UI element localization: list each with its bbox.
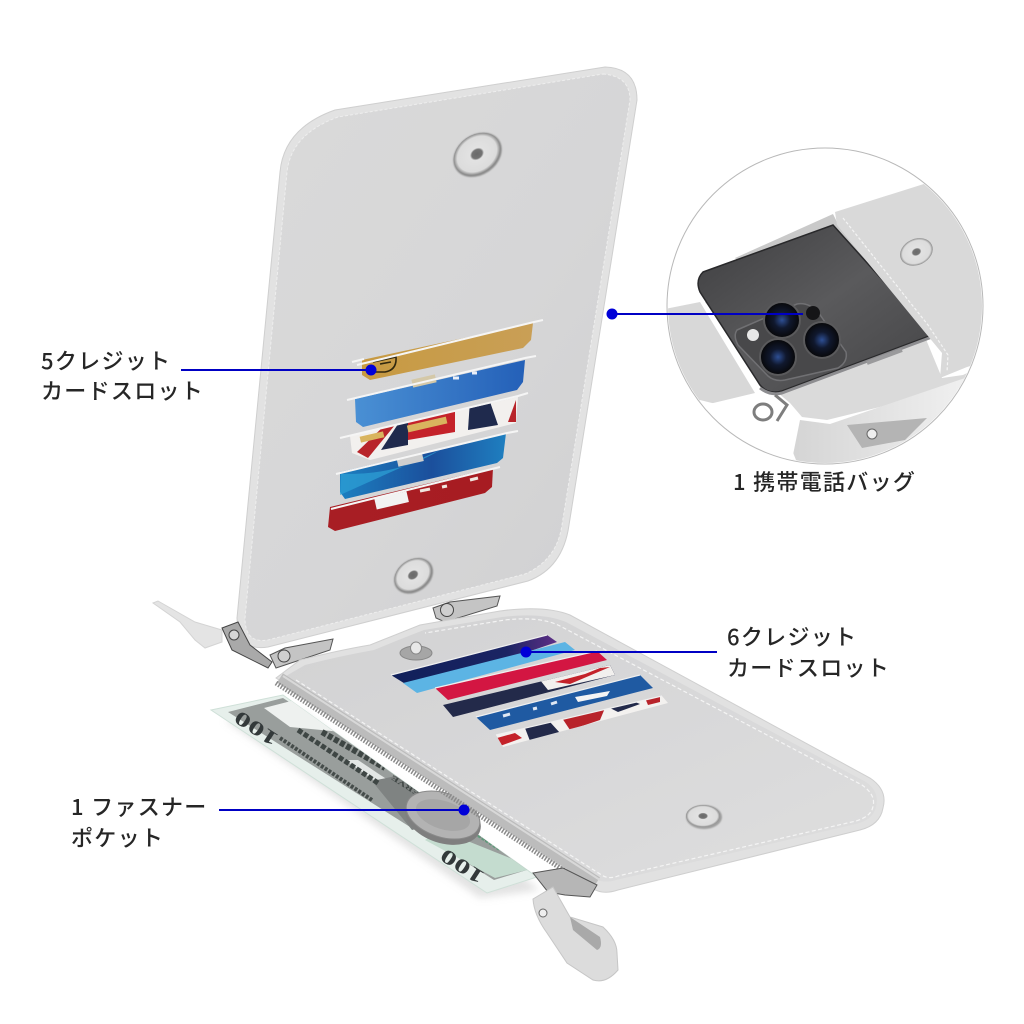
callout: 6 card slots: カードスロット [727, 651, 890, 683]
inset: leather body [668, 214, 967, 463]
strap clasp right [433, 596, 500, 622]
icon: top snap button [445, 124, 510, 186]
lower cards: dark flag card [443, 665, 615, 717]
upper cards: blue card [355, 360, 525, 427]
inset: phone [698, 225, 932, 394]
lower cards: crimson card [435, 651, 607, 700]
zipper pull tab [533, 868, 618, 981]
callout: 5 card slots [41, 344, 376, 406]
panel: upper flap with card slots [237, 67, 637, 648]
strap clasp left [153, 601, 333, 668]
panel: inset phone close-up [660, 148, 990, 470]
callout: phone bag: 1 携帯電話バッグ [733, 465, 916, 497]
bill numeral upper: 100 [230, 706, 282, 751]
inset: camera lenses [747, 302, 840, 375]
lower cards: navy card [391, 635, 557, 690]
inset: ring [754, 395, 787, 421]
zipper [276, 676, 600, 890]
dollar bills [211, 695, 540, 898]
lower cards: flag card [496, 696, 668, 747]
callout: zipper pocket: ポケット [71, 821, 164, 853]
upper cards: red card [328, 468, 493, 531]
lower cards: blue card [476, 675, 653, 730]
upper cards: gold card [362, 323, 533, 380]
upper cards: union flag card [350, 397, 518, 460]
icon: lower snap button [387, 551, 440, 601]
callout: zipper pocket [71, 790, 470, 853]
callout: zipper pocket: 1 ファスナー [71, 790, 208, 822]
slot edges [391, 635, 662, 735]
slot edges [331, 320, 543, 509]
callout: 5 card slots: カードスロット [41, 374, 204, 406]
inset: flap with snap [835, 184, 982, 378]
callout: 5 card slots: 5クレジット [41, 344, 171, 376]
icon: flap snap stud [400, 642, 432, 660]
callout: 6 card slots: 6クレジット [727, 620, 857, 652]
bill serial text: FEDERAL RESERVE [389, 773, 491, 843]
panel: lower pocket [276, 609, 884, 892]
bill numeral lower: 100 [436, 844, 488, 889]
callout: 6 card slots [520, 620, 890, 683]
icon: pocket snap button [686, 805, 722, 829]
upper cards: blue wave card [340, 433, 506, 499]
callout: phone bag [606, 308, 916, 497]
coin [398, 782, 488, 854]
lower cards: light blue card [403, 642, 575, 693]
